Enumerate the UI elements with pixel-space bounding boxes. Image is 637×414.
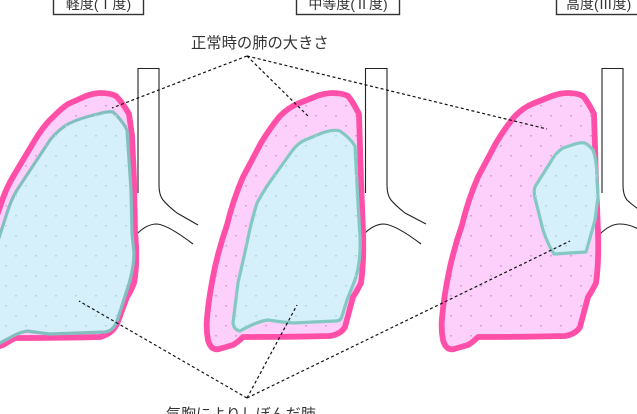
normal lung fill: moderate [207, 93, 363, 349]
outline stroke: severe [442, 93, 598, 349]
airway: severe [600, 68, 637, 234]
airway: moderate [364, 68, 426, 244]
leader lines: normal lung size [112, 56, 547, 129]
airway: mild [136, 68, 198, 244]
outline stroke: moderate [207, 93, 363, 349]
label: normal lung size: 正常時の肺の大きさ [191, 35, 329, 52]
severity label: severe [556, 0, 637, 14]
leader lines: collapsed lung [79, 241, 570, 398]
collapsed lung: mild [0, 112, 134, 344]
severity label: mild [54, 0, 144, 14]
collapsed lung: moderate [233, 130, 360, 331]
outline stroke: mild [0, 93, 136, 349]
severity label: moderate [296, 0, 400, 14]
collapsed lung: severe [534, 143, 598, 254]
normal lung fill: severe [442, 93, 598, 349]
lung: mild [0, 93, 136, 349]
normal lung fill: mild [0, 93, 136, 349]
lung: severe [442, 93, 598, 349]
lung: moderate [207, 93, 363, 349]
